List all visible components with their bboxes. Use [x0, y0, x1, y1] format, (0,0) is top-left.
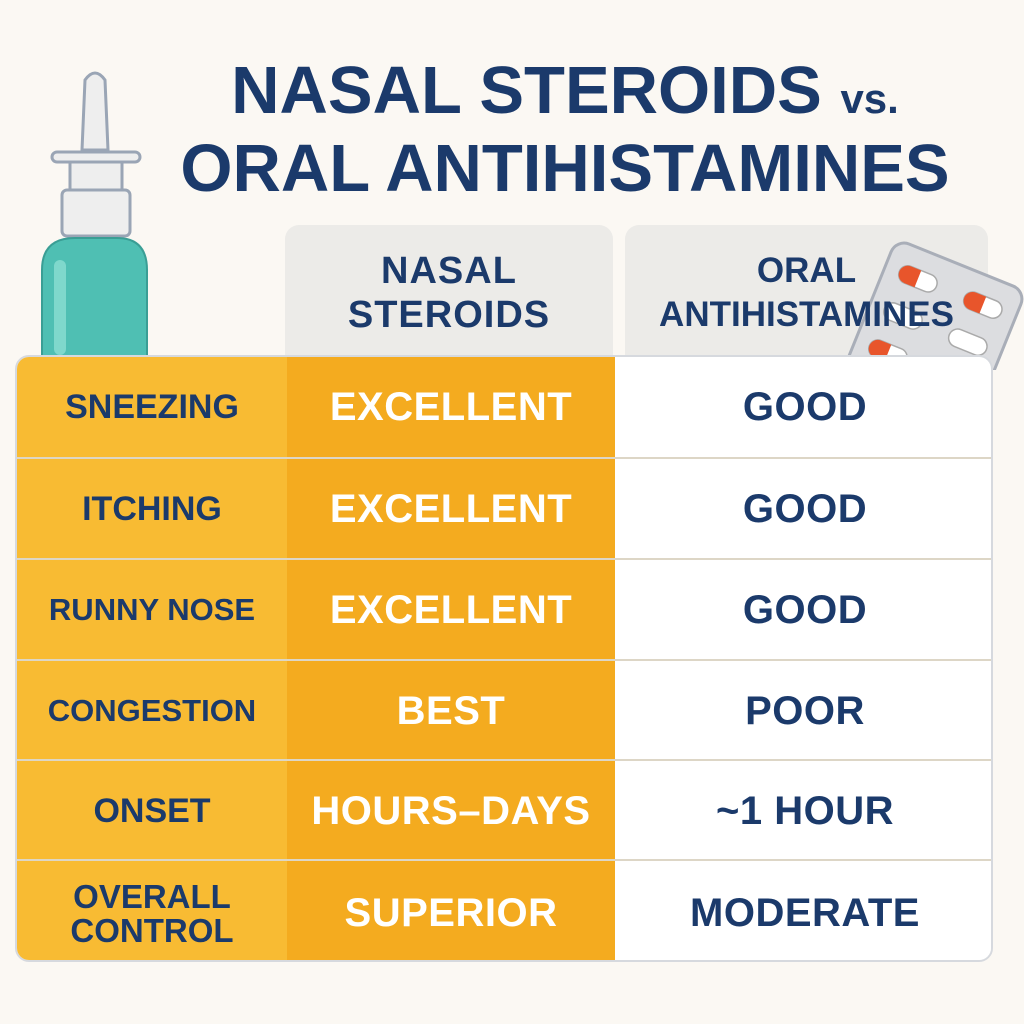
title: NASAL STEROIDS vs.: [231, 53, 899, 128]
row: runny nose: RUNNY NOSE: [49, 592, 255, 627]
row: overall control: CONTROL: [70, 912, 234, 948]
header: oral antihistamines: ORAL: [757, 251, 856, 290]
row: overall control: OVERALL: [73, 878, 231, 914]
icon: nasal spray bottle: [41, 72, 148, 355]
header: nasal steroids: NASAL: [381, 250, 517, 292]
row: congestion: BEST: [397, 688, 505, 732]
row: runny nose: [17, 558, 995, 660]
row: congestion: [17, 659, 995, 761]
header: oral antihistamines: ANTIHISTAMINES: [659, 295, 954, 334]
row: overall control: MODERATE: [690, 891, 920, 935]
row: onset: HOURS–DAYS: [311, 788, 591, 832]
row: runny nose: EXCELLENT: [330, 588, 572, 632]
header: oral antihistamines: [625, 225, 988, 360]
title: ORAL ANTIHISTAMINES: [180, 131, 950, 206]
row: sneezing: EXCELLENT: [330, 384, 572, 428]
row: itching: [17, 457, 995, 559]
row: congestion: POOR: [745, 688, 865, 732]
row: onset: ~1 HOUR: [716, 788, 894, 832]
row: sneezing: [17, 357, 991, 457]
title: [180, 53, 950, 206]
icon: pill blister pack: [848, 242, 1024, 370]
row: runny nose: GOOD: [743, 588, 867, 632]
comparison table: [15, 355, 993, 962]
row: onset: [17, 759, 995, 861]
row: congestion: CONGESTION: [48, 693, 256, 728]
row: sneezing: SNEEZING: [65, 388, 239, 426]
row: itching: GOOD: [743, 486, 867, 530]
row: itching: ITCHING: [82, 490, 222, 528]
row: sneezing: GOOD: [743, 384, 867, 428]
row: onset: ONSET: [93, 792, 211, 830]
row: overall control: SUPERIOR: [345, 891, 557, 935]
row: overall control: [17, 859, 995, 966]
row: itching: EXCELLENT: [330, 486, 572, 530]
header: nasal steroids: STEROIDS: [348, 294, 550, 336]
header: nasal steroids: [285, 225, 613, 360]
